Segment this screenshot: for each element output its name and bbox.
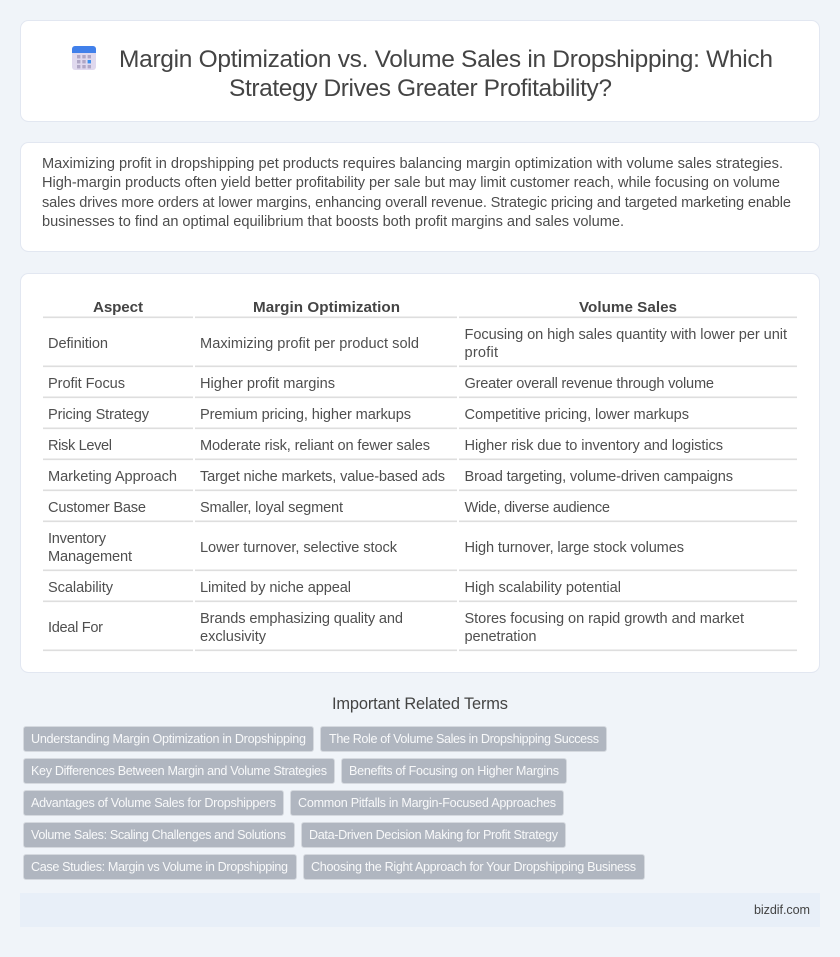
row: customer base: Wide, diverse audience bbox=[464, 500, 610, 516]
row: pricing strategy: Premium pricing, higher markups bbox=[200, 407, 411, 423]
chip: Key Differences Between Margin and Volume Strategies bbox=[31, 764, 327, 778]
row: inventory management: High turnover, large stock volumes bbox=[464, 540, 684, 556]
row: inventory management: Management bbox=[48, 549, 132, 565]
chip bbox=[302, 822, 566, 848]
row: marketing approach bbox=[48, 469, 733, 485]
row: definition: Definition bbox=[48, 336, 108, 352]
table header row bbox=[93, 299, 677, 316]
row: scalability: High scalability potential bbox=[464, 580, 621, 596]
row: ideal for: Ideal For bbox=[48, 620, 103, 636]
row: definition: profit bbox=[464, 345, 498, 361]
row: inventory management: Inventory bbox=[48, 531, 107, 547]
row: risk level: Moderate risk, reliant on fewer sales bbox=[200, 438, 430, 454]
row: scalability bbox=[48, 580, 621, 596]
row: definition bbox=[48, 327, 787, 361]
row: pricing strategy: Competitive pricing, lower markups bbox=[464, 407, 689, 423]
row: ideal for: Stores focusing on rapid growth and market bbox=[464, 611, 744, 627]
row: risk level: Higher risk due to inventory and logistics bbox=[464, 438, 723, 454]
row: pricing strategy: Pricing Strategy bbox=[48, 407, 150, 423]
row: risk level bbox=[48, 438, 723, 454]
footer bbox=[20, 893, 820, 927]
row: customer base: Smaller, loyal segment bbox=[200, 500, 343, 516]
row: profit focus: Greater overall revenue through volume bbox=[464, 376, 714, 392]
row: pricing strategy bbox=[48, 407, 689, 423]
row: marketing approach: Marketing Approach bbox=[48, 469, 177, 485]
panel: title header bbox=[20, 20, 820, 122]
row: scalability: Limited by niche appeal bbox=[200, 580, 351, 596]
table header row: Margin Optimization bbox=[253, 299, 400, 316]
heading: important related terms: Important Related Terms bbox=[332, 695, 508, 713]
title: Strategy Drives Greater Profitability? bbox=[229, 75, 612, 102]
title bbox=[119, 46, 773, 102]
chip: The Role of Volume Sales in Dropshipping Success bbox=[329, 732, 599, 746]
footer: bizdif.com bbox=[754, 903, 810, 917]
chip: Advantages of Volume Sales for Dropshippers bbox=[31, 796, 276, 810]
panel: comparison table bbox=[20, 274, 820, 672]
panel: introduction text: High-margin products often yield better profitability per sale but may limit customer reach, while focusing on volume bbox=[42, 175, 780, 191]
row: ideal for: exclusivity bbox=[200, 629, 267, 645]
chip: Volume Sales: Scaling Challenges and Solutions bbox=[31, 828, 286, 842]
row: definition: Focusing on high sales quantity with lower per unit bbox=[464, 327, 787, 343]
row: ideal for: Brands emphasizing quality and bbox=[200, 611, 403, 627]
row: customer base: Customer Base bbox=[48, 500, 146, 516]
panel: introduction text: businesses to find an optimal equilibrium that boosts both profit margins and sales volume. bbox=[42, 214, 624, 230]
title: Margin Optimization vs. Volume Sales in Dropshipping: Which bbox=[119, 46, 773, 73]
chip bbox=[24, 854, 296, 880]
icon: calendar bbox=[72, 46, 96, 70]
panel: introduction text: Maximizing profit in dropshipping pet products requires balancing margin optimization with volume sales strategies. bbox=[42, 156, 783, 172]
chip bbox=[342, 758, 566, 784]
panel: introduction text bbox=[20, 142, 820, 252]
row: ideal for bbox=[48, 611, 744, 645]
chip bbox=[24, 758, 334, 784]
row: marketing approach: Broad targeting, volume-driven campaigns bbox=[464, 469, 733, 485]
chip: Common Pitfalls in Margin-Focused Approaches bbox=[298, 796, 556, 810]
chip bbox=[24, 822, 294, 848]
row: profit focus: Higher profit margins bbox=[200, 376, 335, 392]
row: inventory management: Lower turnover, selective stock bbox=[200, 540, 398, 556]
row: inventory management bbox=[48, 531, 684, 565]
chip: Choosing the Right Approach for Your Dropshipping Business bbox=[311, 860, 636, 874]
panel: introduction text: sales drives more orders at lower margins, enhancing overall revenue. Strategic pricing and targeted marketing enable bbox=[42, 195, 791, 211]
chip bbox=[24, 726, 314, 752]
row: profit focus bbox=[48, 376, 714, 392]
row: profit focus: Profit Focus bbox=[48, 376, 125, 392]
row: ideal for: penetration bbox=[464, 629, 536, 645]
chip bbox=[320, 726, 606, 752]
row: marketing approach: Target niche markets, value-based ads bbox=[200, 469, 445, 485]
row: scalability: Scalability bbox=[48, 580, 114, 596]
chip: Data-Driven Decision Making for Profit Strategy bbox=[309, 828, 559, 842]
table header row: Volume Sales bbox=[579, 299, 677, 316]
table header row: Aspect bbox=[93, 299, 143, 316]
chip: Benefits of Focusing on Higher Margins bbox=[349, 764, 559, 778]
row: risk level: Risk Level bbox=[48, 438, 112, 454]
related terms chips bbox=[24, 726, 644, 880]
row: customer base bbox=[48, 500, 610, 516]
chip: Case Studies: Margin vs Volume in Dropshipping bbox=[31, 860, 288, 874]
row: definition: Maximizing profit per product sold bbox=[200, 336, 419, 352]
chip: Understanding Margin Optimization in Dropshipping bbox=[31, 732, 306, 746]
chip bbox=[290, 790, 564, 816]
chip bbox=[304, 854, 644, 880]
chip bbox=[24, 790, 284, 816]
